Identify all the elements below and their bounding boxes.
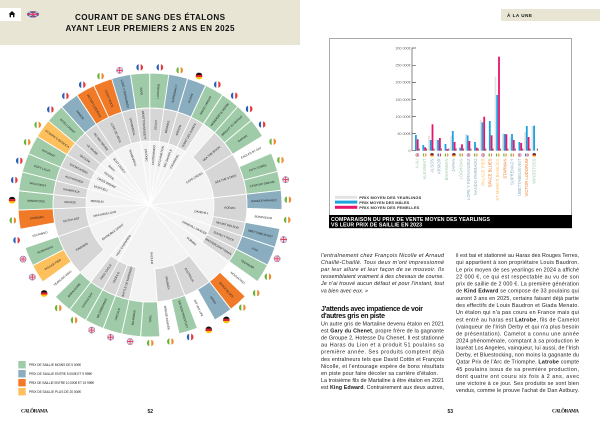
centre ring labels: grandsires [91, 144, 209, 265]
chart caption: VS LEUR PRIX DE SAILLIE EN 2023 [331, 223, 422, 229]
chart stallion names: WINDSTOSS [532, 158, 536, 184]
text block: right column body: prix de saillie de 2 000 €. La première génération [456, 282, 579, 288]
legend: stud fee colours: PRIX DE SAILLIE ENTRE 10 000€ ET 19 999€ [29, 381, 94, 385]
outer ring labels: FIFTY STARS [249, 163, 267, 173]
grey ring labels: AREION [175, 124, 182, 136]
outer ring labels: INTELLOGENT [59, 118, 77, 135]
outer ring labels: ST MARK'S BASILICA [44, 129, 70, 149]
chart stallion names: LOPE Y FERNANDEZ [466, 158, 471, 200]
outer ring labels: EAGLES BY DAY [240, 146, 262, 160]
centre ring labels: grandsires: SCAT DADDY [112, 157, 127, 174]
outer ring labels: JAPAN [209, 295, 217, 305]
y axis: 50 000€ [398, 132, 410, 136]
centre wedge separators [53, 108, 246, 290]
outer ring labels: TECHNOIR [240, 259, 255, 270]
text block: right column body: auront 3 ans en 2025, certains faisant déjà partie [456, 296, 579, 302]
outer ring labels: UBETTABELIEVEIT [247, 228, 274, 239]
centre ring labels: grandsires: ACATENANGO [151, 144, 156, 165]
chart stallion names: SPACE BLUES [488, 158, 493, 187]
header band [0, 0, 300, 45]
text block: right column body: il est bai et stationné au Haras des Rouges Terres, [456, 253, 579, 259]
grey ring labels: BATTLE OF MARENGO [121, 265, 134, 297]
home button [0, 8, 21, 21]
centre ring labels: grandsires: RAHY [107, 164, 116, 173]
centre ring labels: grandsires: DANEHILL DANCER [182, 220, 208, 236]
chart stallion names: UBETTABELIEVEIT [517, 158, 522, 196]
chart stallion names [415, 158, 536, 201]
chart stallion names: JAPAN [451, 158, 456, 172]
outer ring labels: MAGIC DREAM [199, 95, 213, 116]
outer ring labels: CENTURY DREAM [249, 180, 275, 188]
grey ring labels: SCALO [153, 119, 158, 130]
grey ring labels [63, 111, 239, 297]
centre ring labels: grandsires: MACHIAVELLIAN [93, 210, 116, 218]
chart stallion names: ALKUMAIT [422, 158, 427, 179]
text block: right column body: Un étalon qui n'a pas couru en France mais qui [456, 310, 579, 316]
page number 53: 53 [448, 409, 453, 415]
text block: right column body: Qatar Prix de l'Arc de Triomphe. Latrobe compte [456, 360, 579, 366]
chart stallion names: PALACE PIER [480, 158, 485, 186]
text block: left column body: Un autre gris de Martaline devenu étalon en 2021 [321, 322, 444, 328]
text block: right column body: est entré au haras est Latrobe, fils de Camelot [456, 317, 580, 323]
outer ring labels: SAXE [139, 87, 144, 95]
chart legend: PRIX MOYEN DES YEARLINGS [359, 195, 422, 200]
outer ring labels: WALDGEIST [29, 181, 47, 188]
centre ring labels: grandsires: DUBAWI [186, 236, 197, 246]
outer ring labels: TOOL [148, 315, 152, 323]
centre ring labels: grandsires: MONSUN [91, 199, 104, 204]
grey ring labels: LOPE DE VEGA [110, 122, 122, 143]
chart flags [416, 153, 536, 157]
grey ring labels: NO NAY NEVER [93, 132, 109, 152]
footer right: magazine name: CALÔRAMA [552, 406, 579, 414]
chart legend: PRIX MOYEN DES FEMELLES [359, 205, 420, 210]
y axis: 200 000€ [396, 81, 410, 85]
outer ring labels: YEARLING KING [53, 269, 73, 287]
outer ring labels: DARIAK [237, 134, 248, 143]
centre ring labels: grandsires: DANEHILL [194, 209, 209, 215]
text block: left column body: au Haras du Lion et a produit 51 poulains sa [321, 343, 444, 349]
title: AYANT LEUR PREMIERS 2 ANS EN 2025 [66, 24, 235, 33]
chart caption: COMPARAISON DU PRIX DE VENTE MOYEN DES YEARLINGS [331, 217, 491, 223]
text block: left column body: en piste pour faire décoler sa carrière d'étalon. [321, 371, 438, 377]
centre ring labels: grandsires: PIVOTAL [103, 171, 116, 181]
grey ring labels: SAINT DES SAINTS [181, 123, 197, 148]
outer ring labels: NANDO PARRADO [251, 198, 277, 203]
chart legend [335, 195, 422, 210]
grey ring labels: AUSTRALIA [184, 267, 195, 283]
y axis: 300 000€ [396, 46, 410, 50]
centre ring labels: grandsires: SHAMARDAL [128, 149, 138, 168]
text block: italic quote end: Je n'ai trouvé aucun défaut et pour l'instant, tout [320, 281, 444, 287]
grey ring labels: LE HAVRE [86, 143, 99, 156]
centre ring labels: grandsires: ZAFONIC [144, 149, 149, 162]
text block: right column body: de Kind Edward se compose de 33 poulains qui [456, 289, 579, 295]
chart stallion names: SUPREMACY [510, 158, 515, 185]
chart stallion names: LOGHOAN [458, 158, 464, 179]
text block: right column body: 45 poulains issus de sa première production, [456, 367, 579, 373]
outer ring labels: PALACE PIER [44, 258, 62, 271]
text block: right column body: 22 000 €, ce qui est respectable au vu de son [456, 274, 579, 280]
text block: italic quote end: l'entraînement chez François Nicolle et Arnaud [321, 253, 445, 259]
y axis [396, 46, 416, 153]
outer ring labels: VICTOR LUDORUM [86, 93, 103, 119]
centre ring labels: grandsires: GALILEO [150, 252, 154, 265]
grey ring labels: SHAMROCK [63, 187, 80, 194]
section tab: à la une [501, 9, 600, 21]
section tab: à la une: À LA UNE [507, 12, 532, 18]
text block: right column body: (vainqueur de l'Irish Derby et qui n'a plus besoin [456, 324, 579, 330]
outer ring labels: VOLFANGO [32, 230, 49, 238]
grey ring labels: SEA THE MOON [202, 145, 221, 162]
text block: right column body: de présentation). Camelot a connu une année [456, 331, 579, 337]
grey ring labels: AUTHORIZED [65, 174, 84, 184]
legend: stud fee colours: PRIX DE SAILLIE MOINS DE 5 000€ [29, 363, 81, 367]
footer left: magazine name: CALÔRAMA [21, 406, 48, 414]
grey ring labels: KINGMAN [75, 242, 89, 252]
text block: left column body: est Gary du Chenet, propre frère de la gagnante [321, 329, 444, 335]
y axis: 100 000€ [396, 115, 410, 119]
outer ring labels: SUPREMACY [171, 84, 178, 103]
bars: grey yearlings, blue males, pink females, small stud fee tick [415, 57, 538, 151]
text block: right column body: Derby, et Bluestocking, non moins la gagnante du [456, 353, 579, 359]
outer ring labels: SIR RON PRIESTLEY [177, 300, 189, 328]
grey ring labels: SIYOUNI [79, 153, 91, 164]
outer ring labels: LOPE Y FERNANDEZ [120, 79, 130, 109]
text block: italic quote end [320, 253, 445, 294]
outer ring: stallions coloured by stud fee [18, 73, 282, 337]
outer ring labels: BONDACCIO [254, 214, 273, 220]
outer ring labels: SPACE BLUES [218, 281, 234, 298]
text block: italic quote end: par leur allure et leur façon de se mouvoir. Ils [320, 267, 444, 273]
outer ring labels: LINCOLN [114, 308, 121, 321]
chart caption [329, 215, 572, 229]
grey ring labels: SOCIETY ROCK [213, 230, 235, 242]
grey ring labels: WOOTTON BASSETT [141, 111, 147, 140]
centre ring labels: grandsires: HIGH CHAPARRAL [115, 233, 132, 257]
text block: right column body: lauréat Los Angeles, vainqueur, lui aussi, de l'Irish [456, 346, 579, 352]
text block: left column body: de Groupe 2, Hotesse Du Chenet. Il est stationné [321, 336, 444, 342]
outer ring labels: A ALI [251, 246, 259, 253]
grey ring labels: MASTERCRAFTSMAN [204, 237, 232, 256]
grey ring: sires [52, 108, 249, 303]
outer ring labels: HAVANA BAY [81, 292, 94, 309]
chart stallion names: ALSON [429, 158, 434, 173]
outer ring labels: MIRAGE DANCER [163, 305, 171, 330]
y axis: 0 [408, 149, 410, 153]
heading: article subhead: J'attends avec impatience de voir [321, 306, 423, 313]
chart stallion names: BAHAMIAN [444, 158, 449, 180]
light centre disc [53, 108, 247, 302]
grey ring labels: FREE EAGLE [99, 263, 113, 280]
panel: bar chart yearlings vs stud fee [329, 38, 572, 229]
title [66, 13, 235, 33]
sunburst chart: sire lines [9, 64, 291, 346]
outer ring labels: SOFT LIGHT [33, 164, 51, 173]
outer ring labels: WINDSTOSS [27, 199, 45, 203]
page number 52: 52 [148, 409, 153, 415]
outer ring labels: ROSENGAN [37, 245, 54, 255]
outer ring labels: ARMOR [75, 109, 85, 120]
grey ring labels: FRANKEL [164, 276, 171, 290]
centre ring labels: grandsires: BIG SHUFFLE [163, 149, 173, 168]
y axis: 150 000€ [396, 98, 410, 102]
text block: italic quote end: Chaillé-Chaillé. Tous deux m'ont impressionné [321, 260, 444, 266]
chart stallion names: VICTOR LUDORUM [524, 158, 529, 197]
centre ring labels: grandsires: OASIS DREAM [97, 176, 117, 189]
text block: left column body: La troisième fils de Martaline à être étalon en 2021 [321, 378, 444, 384]
outer ring labels: ALSON [187, 93, 194, 104]
text block: left column body: première année. Ses produits comptent déjà [321, 350, 444, 356]
outer ring labels: BARALOUNE [67, 282, 82, 298]
outer ring labels: WONDERFUL MOON [209, 102, 230, 127]
text block: italic quote end: ressemblaient vraiment à des chevaux de course. [321, 274, 444, 280]
centre ring labels: grandsires: MONTJEU [93, 184, 108, 192]
country flags around the wheel [9, 64, 291, 346]
title: COURANT DE SANG DES ÉTALONS [75, 13, 226, 22]
outer ring labels: WILDSBERNER [96, 298, 108, 319]
legend: stud fee colours [18, 361, 94, 395]
grey ring labels: MOUNT NELSON [216, 220, 239, 230]
text block: right column body: Le prix moyen de ses yearlings en 2024 a affiché [456, 267, 579, 273]
y axis: 250 000€ [396, 64, 410, 68]
grey ring labels: MEHMAS [164, 120, 171, 133]
chart legend: PRIX MOYEN DES MÂLES [359, 200, 410, 205]
text block: right column body: dont quatre ont couru six fois à 2 ans, avec [456, 374, 579, 380]
grey ring labels: DUTCH ART [63, 216, 80, 223]
grey ring labels: TEOFILO [112, 270, 121, 284]
grey ring labels: MAXIOS [64, 200, 76, 204]
chart stallion names: ARMOR [437, 158, 442, 174]
outer ring labels: LACCARIO [156, 83, 161, 99]
chart stallion names: ST MARK'S BASILICA [495, 158, 500, 201]
outer ring labels: BAHAMIAN [130, 310, 137, 326]
legend: stud fee colours: PRIX DE SAILLIE PLUS DE 20 000€ [29, 390, 81, 394]
text block: italic quote end: va bien avec eux. » [321, 288, 368, 294]
text block: right column body: 2024 phénoménale, comptant à sa production le [456, 339, 579, 345]
chart stallion names: NANDO PARRADO [473, 158, 478, 195]
centre ring labels: grandsires: CAPE CROSS [185, 171, 204, 184]
text block: right column body: une victoire à ce jour. Ses produits se sont bien [456, 381, 579, 387]
outer ring labels: ALKUMAIT [41, 148, 56, 158]
heading: article subhead [321, 306, 423, 320]
chart stallion names: A ALI [415, 158, 420, 168]
outer ring labels: WRIGHT TO WOULD [220, 115, 243, 137]
chart stallion names: STARMAN [502, 158, 507, 179]
text block: right column body: des effectifs de Louis Baudron et Giada Menato. [456, 303, 579, 309]
outer ring labels: STARMAN [30, 215, 44, 220]
heading: article subhead: d'autres gris en piste [321, 313, 385, 320]
grey ring labels: SEA THE STARS [214, 173, 237, 184]
text block: right column body [456, 253, 580, 394]
outer ring labels: MOCHATINO [230, 271, 246, 285]
grey ring labels: KODIAC [224, 206, 236, 210]
text block: right column body: vendus, comme le prouve l'achat de Dan Astbury. [456, 388, 579, 394]
text block: left column body: Nicolle, et l'entourage espère de bons résultats [321, 364, 444, 370]
text block: right column body: qui appartient à son propriétaire Louis Baudron. [456, 260, 579, 266]
text block: left column body [321, 322, 444, 391]
grey ring labels: SHAMARDAL [128, 118, 136, 137]
grey ring labels: SHOWCASING [69, 162, 89, 175]
legend: stud fee colours: PRIX DE SAILLIE ENTRE 5 000€ ET 9 999€ [29, 372, 92, 376]
text block: left column body: des entraîneurs tels que David Cottin et François [321, 357, 444, 363]
centre ring labels: grandsires: CADOUDAL [169, 153, 180, 169]
outer ring labels: LUCKY ROCK [104, 89, 114, 108]
outer ring labels: RIP VAN LIFE [193, 299, 204, 317]
text block: left column body: est King Edward. Contrairement aux deux autres, [321, 385, 444, 391]
outer ring labels [27, 79, 277, 330]
centre ring labels: grandsires: INVINCIBLE SPIRIT [101, 223, 125, 241]
icon: english language flag [27, 11, 39, 18]
centre ring labels: grandsires: ACCLAMATION [157, 146, 165, 167]
